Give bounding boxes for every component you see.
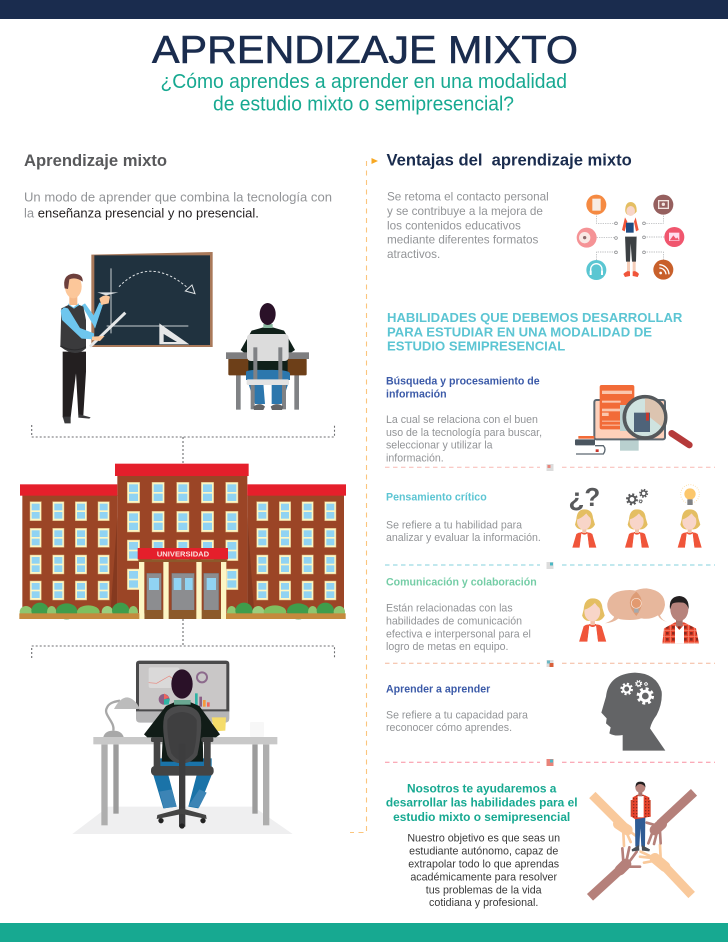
woman — [622, 202, 639, 277]
skill: aprender a aprender — [386, 684, 528, 734]
ventajas text: los contenidos educativos — [387, 219, 521, 232]
monitor — [136, 661, 229, 723]
skill heading — [386, 376, 540, 400]
title: APRENDIZAJE MIXTO — [152, 29, 578, 72]
panel: ventajas — [386, 151, 684, 280]
student at desk — [226, 303, 309, 410]
callout text: Nuestro objetivo es que seas un — [407, 833, 560, 845]
heading: habilidades: PARA ESTUDIAR EN UNA MODALIDAD DE — [387, 324, 652, 339]
skill text: uso de la tecnología para buscar, — [386, 427, 542, 439]
dotted connector: classroom to university — [32, 425, 334, 463]
icon: computer and magnifier — [575, 385, 689, 454]
ventajas text: atractivos. — [387, 248, 440, 261]
skill text: información. — [386, 452, 444, 464]
skill text: logro de metas en equipo. — [386, 641, 509, 653]
panel: nosotros — [386, 781, 694, 909]
top bar — [0, 0, 728, 19]
icon: conversation with idea — [579, 588, 699, 643]
ventajas text: mediante diferentes formatos — [387, 234, 539, 247]
callout text: estudiante autónomo, capaz de — [409, 846, 558, 858]
skill heading: Comunicación y colaboración — [386, 577, 537, 589]
subtitle: ¿Cómo aprendes a aprender en una modalidad — [160, 70, 567, 93]
man — [662, 596, 699, 643]
subtitle — [160, 70, 567, 116]
callout heading: Nosotros te ayudaremos a — [407, 781, 557, 795]
callout heading — [386, 781, 578, 824]
seated student — [144, 669, 220, 829]
callout heading: estudio mixto o semipresencial — [393, 810, 570, 824]
arms and hands — [590, 792, 694, 897]
skill heading: información — [386, 388, 447, 400]
university sign: UNIVERSIDAD — [157, 549, 209, 558]
heading: aprendizaje mixto: Aprendizaje mixto — [24, 151, 167, 170]
callout heading: desarrollar las habilidades para el — [386, 796, 578, 810]
skill: comunicacion — [386, 577, 537, 653]
blackboard — [91, 252, 213, 347]
callout text — [407, 833, 560, 909]
illustration: student at computer — [72, 661, 293, 834]
skill text: Están relacionadas con las — [386, 603, 513, 615]
standing student — [631, 782, 651, 851]
desk — [93, 737, 277, 825]
skill heading: Búsqueda y procesamiento de — [386, 376, 540, 388]
divider 3 — [385, 660, 715, 667]
ventajas text — [387, 191, 549, 261]
intro text: la enseñanza presencial y no presencial. — [24, 206, 259, 220]
skill: busqueda — [386, 376, 542, 464]
skill heading: Aprender a aprender — [386, 684, 490, 696]
skill text: efectiva e interpersonal para el — [386, 628, 531, 640]
panel: habilidades — [385, 310, 715, 766]
illustration: teacher and student — [60, 252, 309, 423]
heading: ventajas: Ventajas del aprendizaje mixto — [386, 151, 632, 170]
heading: habilidades: HABILIDADES QUE DEBEMOS DESARROLLAR — [387, 310, 683, 325]
callout text: extrapolar todo lo que aprendas — [408, 858, 559, 870]
ventajas text: Se retoma el contacto personal — [387, 191, 549, 204]
callout text: académicamente para resolver — [410, 871, 558, 883]
intro text: Un modo de aprender que combina la tecnología con — [24, 190, 332, 204]
divider 2 — [385, 562, 715, 569]
skill text: seleccionar y utilizar la — [386, 440, 493, 452]
university sign — [138, 548, 228, 562]
illustration: university building — [19, 464, 346, 619]
sticky note — [212, 717, 226, 731]
subtitle: de estudio mixto o semipresencial? — [213, 92, 514, 116]
skill text: La cual se relaciona con el buen — [386, 414, 538, 426]
skill text: Se refiere a tu capacidad para — [386, 709, 528, 721]
skill: pensamiento — [386, 492, 541, 544]
skill text — [386, 519, 541, 544]
callout text: tus problemas de la vida — [426, 884, 542, 896]
ventajas text: y se contribuye a la mejora de — [387, 205, 543, 218]
skill text — [386, 709, 528, 734]
skill text — [386, 603, 531, 653]
intro text — [24, 190, 332, 220]
teacher — [60, 274, 125, 423]
dotted connector: university to study desk — [32, 619, 334, 658]
skill text: habilidades de comunicación — [386, 615, 522, 627]
skill text: reconocer cómo aprendes. — [386, 722, 512, 734]
icon: head with gears — [601, 673, 665, 751]
heading: habilidades — [387, 310, 683, 354]
icon: three thinking figures — [568, 482, 702, 548]
heading: habilidades: ESTUDIO SEMIPRESENCIAL — [387, 339, 565, 354]
callout text: cotidiana y profesional. — [429, 897, 538, 909]
skill heading: Pensamiento crítico — [386, 492, 487, 504]
icon group: woman with media formats — [577, 195, 684, 280]
entrance — [139, 559, 226, 619]
desk lamp — [103, 697, 140, 737]
arrow marker — [372, 158, 378, 164]
orange dashed timeline — [350, 161, 366, 832]
icon: three thinking figures: ¿? — [568, 482, 600, 512]
skill text: analizar y evaluar la información. — [386, 532, 541, 544]
divider 1 — [385, 464, 715, 471]
divider 4 — [385, 759, 715, 766]
mug — [250, 722, 264, 737]
panel: left column intro — [24, 151, 332, 220]
skill text — [386, 414, 542, 464]
skill text: Se refiere a tu habilidad para — [386, 519, 522, 531]
bottom bar — [0, 923, 728, 942]
ground and bushes — [19, 603, 346, 619]
windows — [30, 482, 336, 600]
icon: student among hands — [590, 782, 694, 897]
